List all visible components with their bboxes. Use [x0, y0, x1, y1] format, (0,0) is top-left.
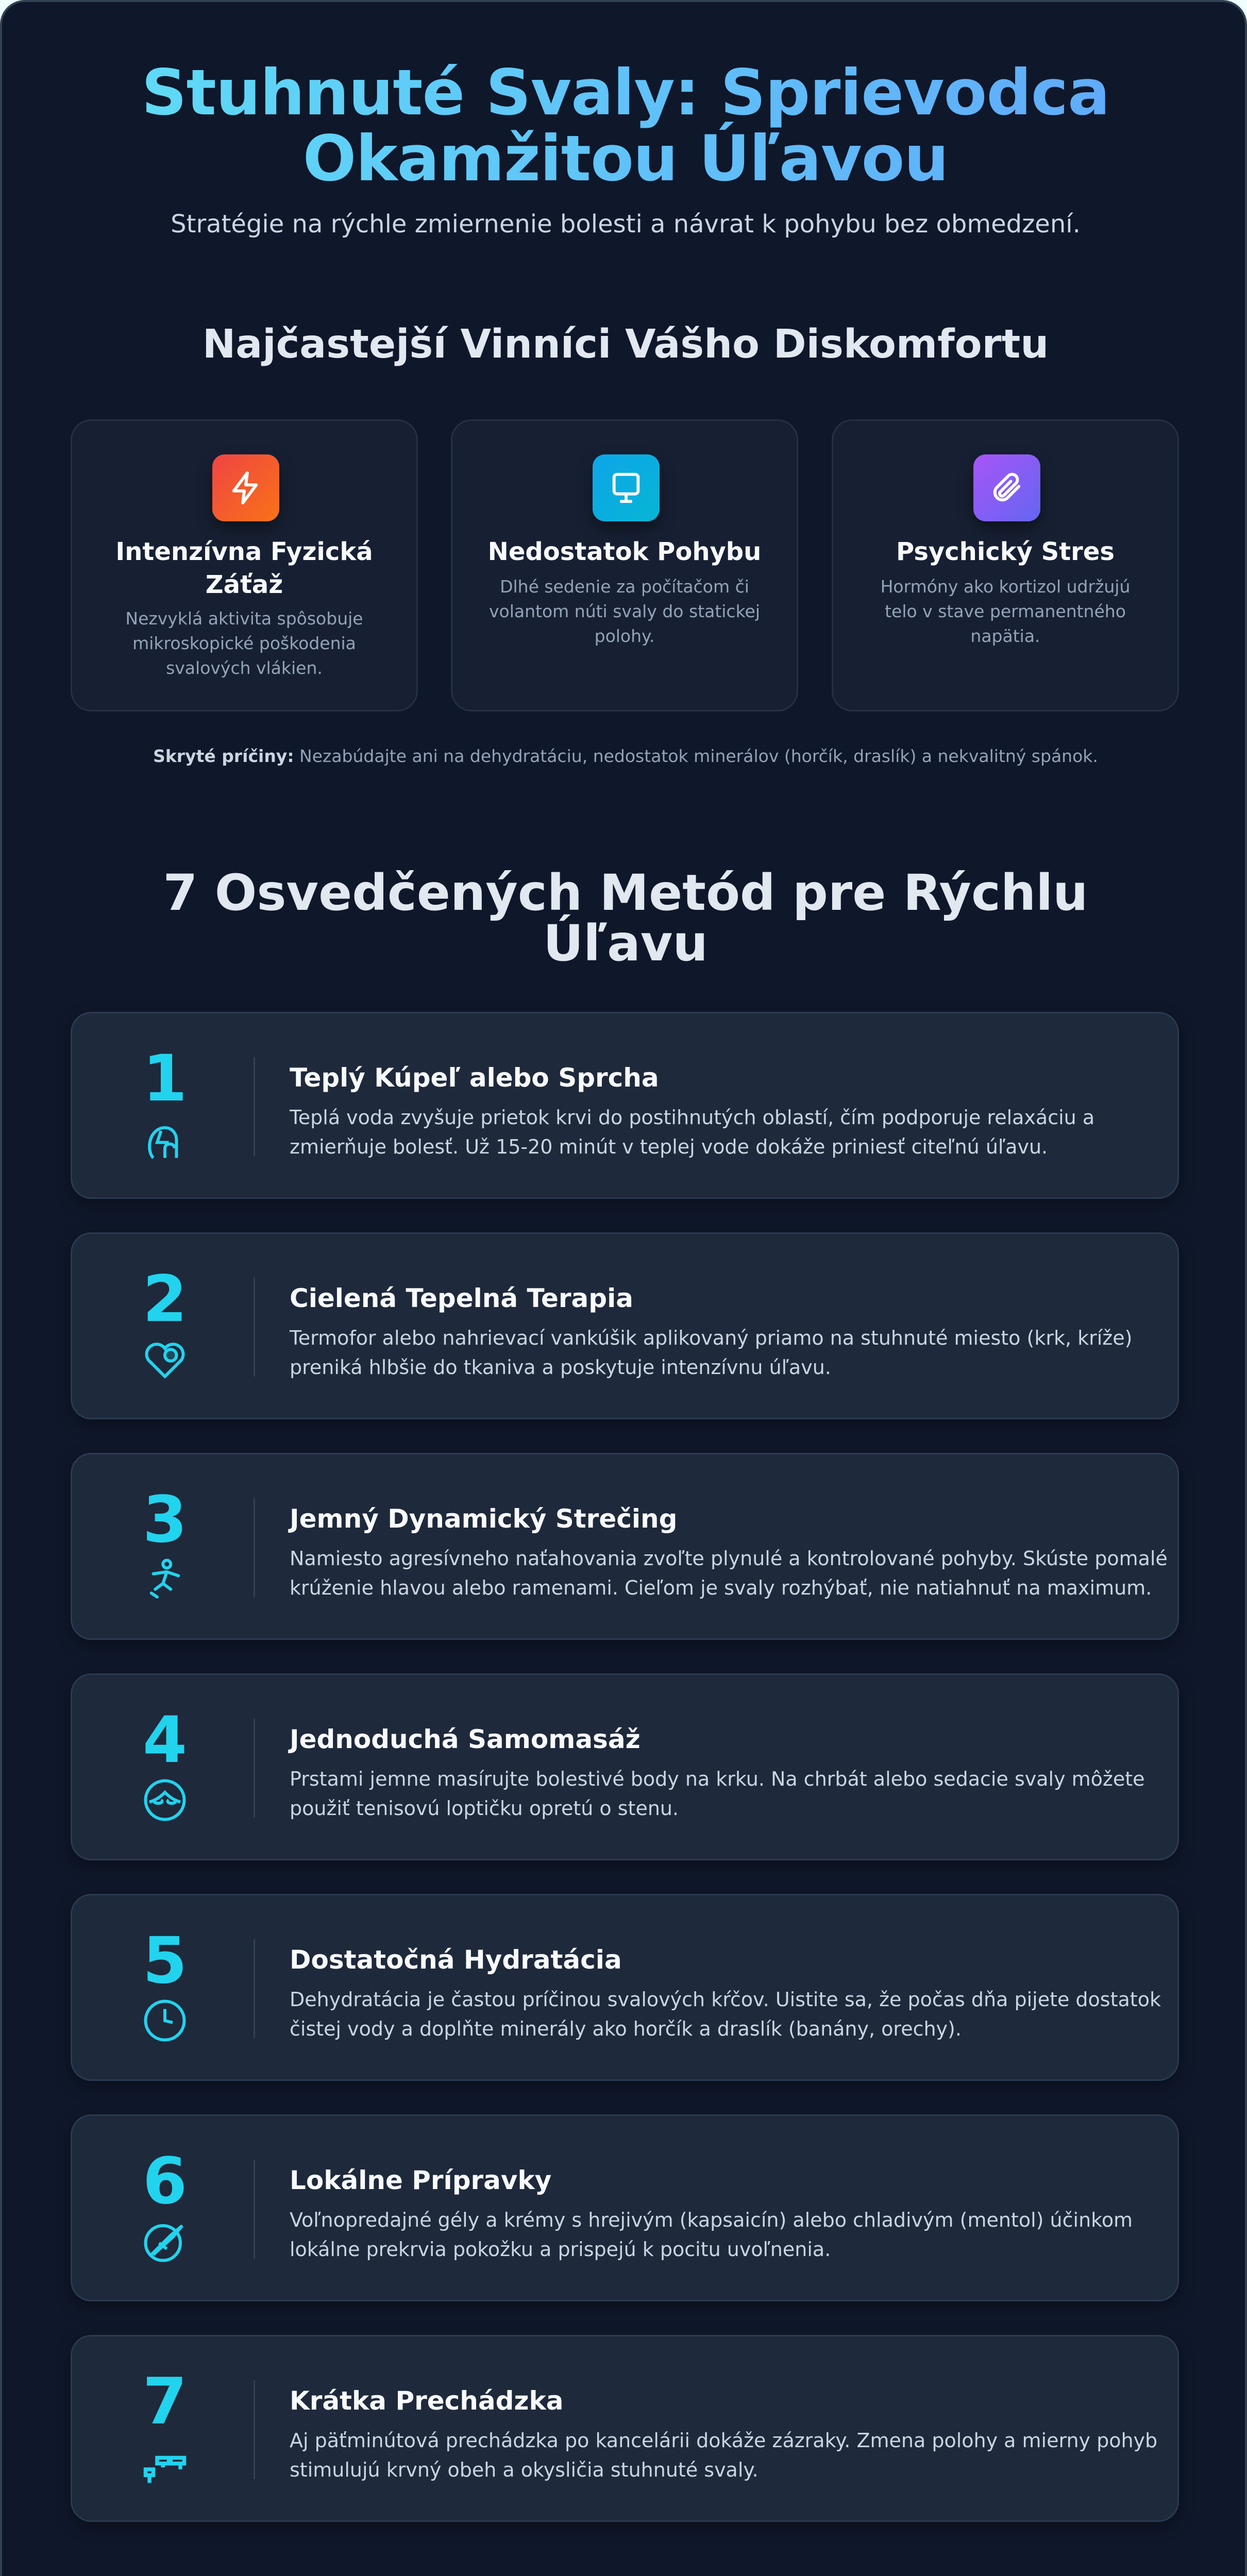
method 7: Aj päťminútová prechádzka po kancelárii dokáže zázraky. Zmena polohy a mierny pohyb stimulujú krvný obeh a okysličia stuhnuté svaly. [290, 2429, 1157, 2481]
method 3 [71, 1453, 1179, 1640]
method 6 [71, 2114, 1179, 2301]
method 2 [71, 1232, 1179, 1419]
method 3: 3 [143, 1483, 187, 1557]
method 6: 6 [143, 2144, 187, 2218]
icon: clock [144, 2000, 186, 2041]
method 1: Teplý Kúpeľ alebo Sprcha [290, 1063, 659, 1093]
panel: cause 1 [71, 419, 418, 711]
icon: stretching figure [149, 1559, 180, 1599]
title [2, 60, 1247, 192]
cause text: Hormóny ako kortizol udržujú telo v stave permanentného napätia. [881, 577, 1130, 646]
method 1 [71, 1012, 1179, 1199]
cause title [115, 537, 373, 599]
method 5: Dehydratácia je častou príčinou svalových kŕčov. Uistite sa, že počas dňa pijete dostatok čistej vody a doplňte minerály ako horčík a draslík (banány, orechy). [290, 1988, 1161, 2040]
subtitle: Stratégie na rýchle zmiernenie bolesti a návrat k pohybu bez obmedzení. [171, 210, 1081, 239]
panel: cause 3 [832, 419, 1179, 711]
method 7: 7 [143, 2365, 187, 2439]
method 4: Jednoduchá Samomasáž [290, 1724, 641, 1754]
title: Stuhnuté Svaly: Sprievodca [142, 56, 1109, 129]
heading: causes: Najčastejší Vinníci Vášho Diskomfortu [203, 321, 1049, 367]
title: Okamžitou Úľavou [303, 122, 948, 195]
cause title: Nedostatok Pohybu [488, 537, 761, 566]
cause text: Dlhé sedenie za počítačom či volantom núti svaly do statickej polohy. [489, 577, 760, 646]
method 2: 2 [143, 1262, 187, 1336]
cause text: Nezvyklá aktivita spôsobuje mikroskopické poškodenia svalových vlákien. [125, 608, 363, 678]
method 2: Cielená Tepelná Terapia [290, 1283, 633, 1313]
method 6: Lokálne Prípravky [290, 2165, 551, 2195]
method 4: 4 [143, 1703, 187, 1777]
icon: monitor [593, 454, 660, 521]
icon: pill [144, 2224, 183, 2262]
method 3: Jemný Dynamický Strečing [290, 1504, 677, 1534]
icon: massage [144, 1780, 186, 1821]
method 7 [71, 2335, 1179, 2522]
method 6: Voľnopredajné gély a krémy s hrejivým (kapsaicín) alebo chladivým (mentol) účinkom lokálne prekrvia pokožku a prispejú k pocitu uvoľnenia. [290, 2209, 1133, 2261]
heading: methods [163, 864, 1088, 972]
method 3: Namiesto agresívneho naťahovania zvoľte plynulé a kontrolované pohyby. Skúste pomalé krúženie hlavou alebo ramenami. Cieľom je svaly rozhýbať, nie natiahnuť na maximum. [290, 1547, 1168, 1599]
method 5 [71, 1894, 1179, 2081]
icon: walking [143, 2455, 187, 2483]
method 5: Dostatočná Hydratácia [290, 1945, 622, 1975]
heading: methods: 7 Osvedčených Metód pre Rýchlu [163, 864, 1088, 922]
method 2: Termofor alebo nahrievací vankúšik aplikovaný priamo na stuhnuté miesto (krk, kríže) preniká hlbšie do tkaniva a poskytuje intenzívnu úľavu. [290, 1327, 1132, 1379]
method 4 [71, 1673, 1179, 1860]
cause title: Intenzívna Fyzická [115, 537, 373, 566]
method 1: 1 [143, 1042, 187, 1116]
method 4: Prstami jemne masírujte bolestivé body na krku. Na chrbát alebo sedacie svaly môžete použiť tenisovú loptičku opretú o stenu. [290, 1768, 1145, 1820]
icon: bath [148, 1126, 178, 1159]
heading: methods: Úľavu [543, 914, 708, 972]
cause title: Psychický Stres [896, 537, 1115, 566]
icon: heart [145, 1343, 184, 1379]
icon: lightning [212, 454, 279, 521]
panel: cause 2 [451, 419, 798, 711]
method 5: 5 [143, 1924, 187, 1998]
method 1: Teplá voda zvyšuje prietok krvi do postihnutých oblastí, čím podporuje relaxáciu a zmierňuje bolesť. Už 15-20 minút v teplej vode dokáže priniesť citeľnú úľavu. [290, 1106, 1094, 1158]
method 7: Krátka Prechádzka [290, 2386, 564, 2416]
icon: paperclip [973, 454, 1040, 521]
cause title: Záťaž [206, 570, 283, 599]
hidden causes note: Skryté príčiny: Nezabúdajte ani na dehydratáciu, nedostatok minerálov (horčík, draslík) a nekvalitný spánok. [153, 746, 1098, 766]
